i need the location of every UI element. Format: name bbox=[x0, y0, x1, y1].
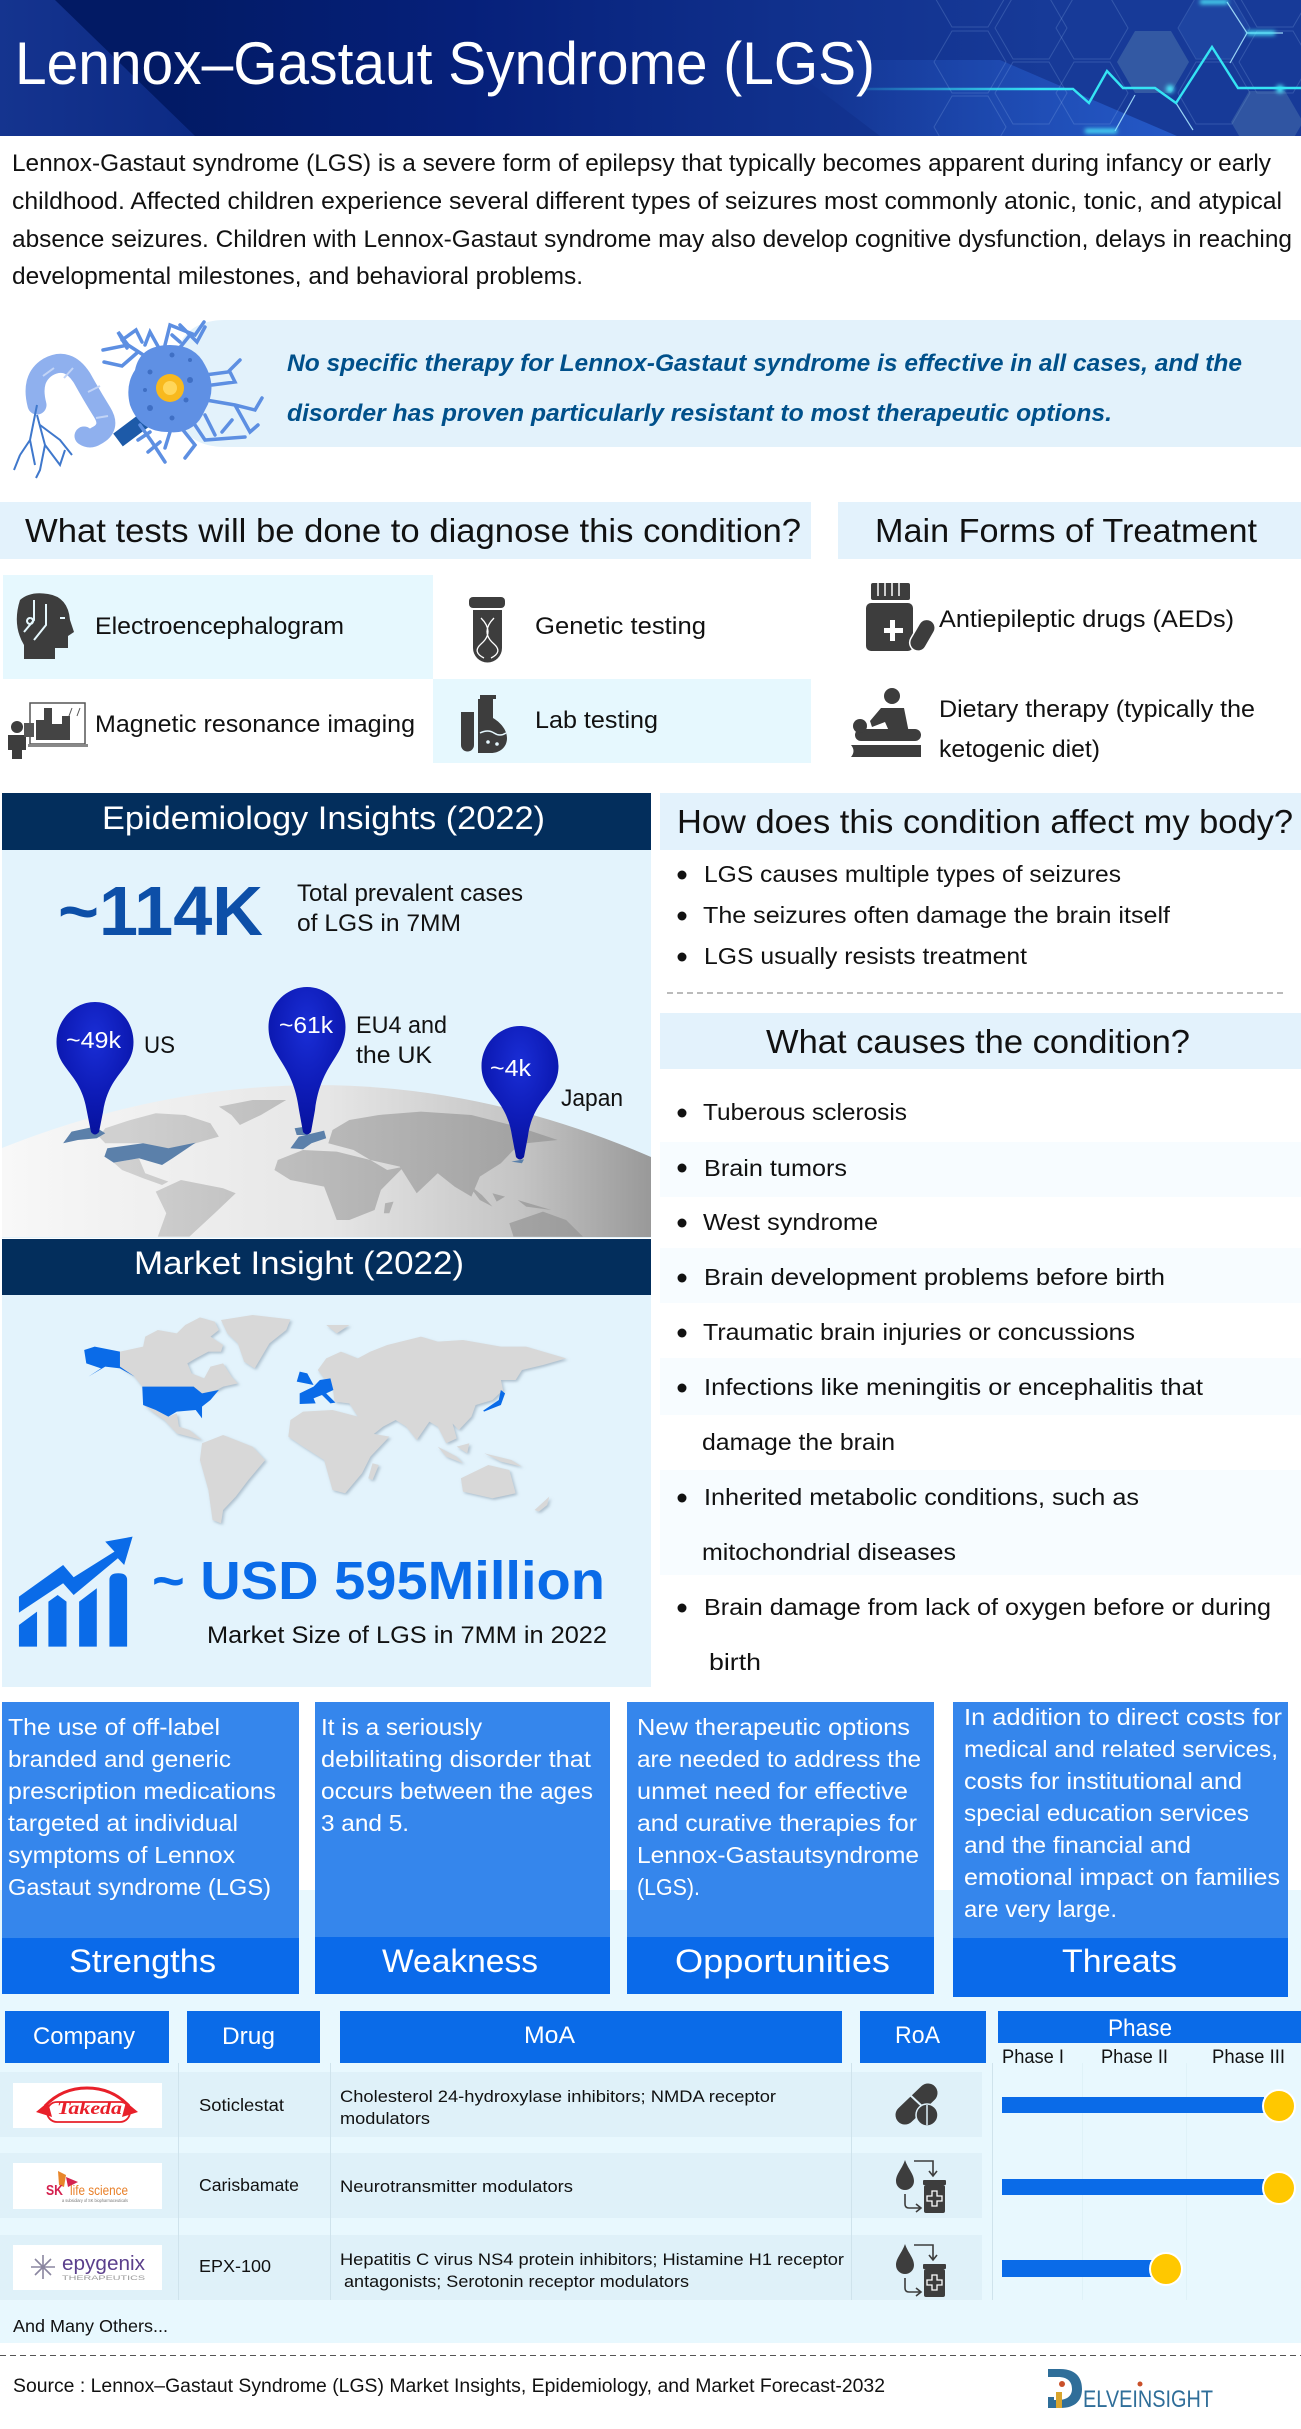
list: causes: mitochondrial diseases bbox=[702, 1539, 956, 1565]
phase bar: Carisbamate bbox=[1002, 2172, 1295, 2204]
intro paragraph bbox=[12, 150, 1292, 290]
list: effects on the body: The seizures often damage the brain itself bbox=[703, 902, 1171, 928]
icon: oral route pills bbox=[905, 2093, 938, 2126]
panel: market insight bbox=[2, 1239, 651, 1687]
callout: no specific therapy bbox=[178, 320, 1301, 447]
SWOT card: threats: medical and related services, bbox=[964, 1736, 1278, 1762]
pin: Japan: Japan bbox=[561, 1085, 623, 1112]
list: causes: Tuberous sclerosis bbox=[703, 1099, 907, 1125]
SWOT card: threats: Threats bbox=[1062, 1943, 1177, 1979]
test cell: genetic testing: Genetic testing bbox=[535, 613, 706, 640]
SWOT card: threats: costs for institutional and bbox=[964, 1768, 1242, 1794]
heading: market insight: Market Insight (2022) bbox=[134, 1245, 464, 1281]
world map bbox=[84, 1315, 566, 1523]
list: causes: West syndrome bbox=[703, 1209, 878, 1235]
heading: market insight bbox=[2, 1239, 651, 1295]
table rows bbox=[0, 2072, 982, 2300]
logo: SK life science: SK bbox=[46, 2182, 63, 2199]
source: Source : Lennox–Gastaut Syndrome (LGS) Market Insights, Epidemiology, and Market Forecast-2032 bbox=[13, 2376, 885, 2397]
heading: main forms of treatment: Main Forms of Treatment bbox=[875, 512, 1257, 549]
SWOT card: weakness: debilitating disorder that bbox=[321, 1746, 592, 1772]
intro paragraph: Lennox-Gastaut syndrome (LGS) is a severe form of epilepsy that typically becomes apparent during infancy or early bbox=[12, 150, 1271, 177]
SWOT card: opportunities bbox=[627, 1702, 934, 1994]
table header: MoA bbox=[524, 2022, 575, 2049]
table header: Phase bbox=[1108, 2015, 1172, 2042]
treatment: dietary therapy: Dietary therapy (typically the bbox=[939, 696, 1255, 723]
pin: Japan: ~4k bbox=[490, 1055, 532, 1081]
SWOT card: threats: and the financial and bbox=[964, 1832, 1191, 1858]
logo: Takeda: Takeda bbox=[57, 2098, 122, 2118]
intro paragraph: developmental milestones, and behavioral problems. bbox=[12, 263, 583, 290]
pin: EU4 and the UK: ~61k bbox=[279, 1012, 334, 1038]
callout: no specific therapy: disorder has proven particularly resistant to most therapeutic options. bbox=[287, 400, 1112, 427]
SWOT card: weakness: occurs between the ages bbox=[321, 1778, 593, 1804]
pin: US: US bbox=[144, 1032, 175, 1059]
test cell: magnetic resonance imaging: Magnetic resonance imaging bbox=[95, 711, 415, 738]
stat: market size: Market Size of LGS in 7MM in 2022 bbox=[207, 1622, 607, 1649]
intro paragraph: absence seizures. Children with Lennox-Gastaut syndrome may also develop cognitive dysfunction, delays in reaching bbox=[12, 226, 1292, 253]
row text: mechanisms of action bbox=[340, 2088, 845, 2291]
table header: Phase III bbox=[1212, 2046, 1285, 2068]
row text: mechanisms of action: Neurotransmitter modulators bbox=[340, 2178, 573, 2196]
ECG line bbox=[860, 47, 1301, 103]
heading: diagnostic tests: What tests will be done to diagnose this condition? bbox=[25, 512, 801, 549]
table header: Phase I bbox=[1002, 2046, 1064, 2068]
pin: Japan bbox=[482, 1026, 623, 1160]
SWOT card: opportunities: unmet need for effective bbox=[637, 1778, 908, 1804]
logo: epygenix bbox=[13, 2245, 162, 2290]
SWOT card: threats bbox=[953, 1702, 1288, 1997]
table header: Company bbox=[33, 2023, 135, 2050]
list: causes: Traumatic brain injuries or concussions bbox=[703, 1319, 1135, 1345]
list: causes bbox=[660, 1099, 1301, 1675]
table header: RoA bbox=[895, 2022, 940, 2049]
test cell: electroencephalogram: Electroencephalogram bbox=[95, 613, 344, 640]
row text: mechanisms of action: Hepatitis C virus NS4 protein inhibitors; Histamine H1 receptor bbox=[340, 2251, 845, 2269]
test cell: genetic testing bbox=[469, 597, 706, 662]
test cell: lab testing bbox=[433, 679, 811, 763]
logo: SK life science bbox=[13, 2163, 162, 2209]
heading: how does this condition affect my body bbox=[660, 793, 1301, 850]
list: causes: damage the brain bbox=[702, 1429, 895, 1455]
SWOT card: strengths: branded and generic bbox=[8, 1746, 231, 1772]
SWOT card: opportunities: New therapeutic options bbox=[637, 1714, 910, 1740]
list: causes: birth bbox=[709, 1649, 761, 1675]
test cell: lab testing: Lab testing bbox=[535, 707, 658, 734]
note: and many others: And Many Others... bbox=[13, 2316, 168, 2336]
heading: what causes the condition: What causes the condition? bbox=[766, 1023, 1190, 1060]
list: causes: Infections like meningitis or encephalitis that bbox=[704, 1374, 1204, 1400]
SWOT card: opportunities: and curative therapies for bbox=[637, 1810, 917, 1836]
row text: mechanisms of action: modulators bbox=[340, 2110, 430, 2128]
pin: US: ~49k bbox=[66, 1027, 122, 1053]
stat: market size: ~ USD 595Million bbox=[152, 1551, 605, 1611]
row text: drugs: EPX-100 bbox=[199, 2256, 271, 2276]
stat: total prevalent cases: ~114K bbox=[58, 872, 263, 950]
SWOT card: strengths: Strengths bbox=[69, 1943, 216, 1979]
logo: Takeda bbox=[13, 2083, 162, 2128]
heading: what causes the condition bbox=[660, 1013, 1301, 1069]
list: effects on the body: LGS causes multiple types of seizures bbox=[704, 861, 1121, 887]
SWOT card: strengths bbox=[2, 1702, 299, 1994]
SWOT card: weakness: 3 and 5. bbox=[321, 1810, 409, 1836]
SWOT card: strengths: symptoms of Lennox bbox=[8, 1842, 235, 1868]
SWOT card: threats: special education services bbox=[964, 1800, 1249, 1826]
stat: total prevalent cases bbox=[58, 872, 523, 950]
heading: main forms of treatment bbox=[838, 502, 1301, 559]
icon: neuron bbox=[14, 322, 262, 478]
SWOT card: weakness bbox=[315, 1702, 610, 1994]
list: effects on the body: LGS usually resists treatment bbox=[704, 943, 1028, 969]
treatment: dietary therapy bbox=[851, 688, 1255, 763]
SWOT card: opportunities: are needed to address the bbox=[637, 1746, 921, 1772]
logo: DelveInsight: ELVEINSIGHT bbox=[1083, 2386, 1213, 2413]
test cell: magnetic resonance imaging bbox=[8, 703, 415, 759]
pale table backdrop bbox=[0, 1890, 1301, 2343]
logo: epygenix: THERAPEUTICS bbox=[62, 2275, 146, 2282]
stat: total prevalent cases: Total prevalent cases bbox=[297, 880, 523, 907]
stat: total prevalent cases: of LGS in 7MM bbox=[297, 910, 461, 937]
pin: EU4 and the UK bbox=[268, 987, 447, 1134]
treatment: antiepileptic drugs bbox=[866, 583, 1234, 654]
table header: Drug bbox=[222, 2023, 275, 2050]
logo: SK life science: a subsidiary of SK biopharmaceuticals bbox=[62, 2198, 129, 2203]
SWOT card: strengths: Gastaut syndrome (LGS) bbox=[8, 1874, 271, 1900]
row text: drugs: Soticlestat bbox=[199, 2095, 284, 2115]
SWOT card: threats: are very large. bbox=[964, 1896, 1117, 1922]
SWOT card: weakness: It is a seriously bbox=[321, 1714, 482, 1740]
row text: drugs bbox=[199, 2095, 299, 2276]
list: causes: Brain development problems before birth bbox=[704, 1264, 1165, 1290]
heading: diagnostic tests bbox=[0, 502, 811, 559]
panel: epidemiology insights bbox=[2, 793, 651, 1238]
test cell: electroencephalogram bbox=[3, 575, 433, 679]
pin: EU4 and the UK: the UK bbox=[356, 1042, 432, 1069]
SWOT card: opportunities: (LGS). bbox=[637, 1874, 700, 1900]
pin: US bbox=[56, 1002, 175, 1134]
SWOT card: opportunities: Lennox-Gastautsyndrome bbox=[637, 1842, 919, 1868]
title: Lennox–Gastaut Syndrome (LGS) bbox=[15, 30, 875, 97]
row text: mechanisms of action: Cholesterol 24-hydroxylase inhibitors; NMDA receptor bbox=[340, 2088, 777, 2106]
callout: no specific therapy: No specific therapy for Lennox-Gastaut syndrome is effective in all cases, and the bbox=[287, 350, 1242, 377]
heading: epidemiology: Epidemiology Insights (2022) bbox=[102, 800, 545, 836]
heading: how does this condition affect my body: How does this condition affect my body? bbox=[677, 803, 1293, 840]
SWOT card: threats: emotional impact on families bbox=[964, 1864, 1280, 1890]
SWOT card: threats: In addition to direct costs for bbox=[964, 1704, 1282, 1730]
globe map bbox=[2, 1085, 651, 1237]
header banner bbox=[0, 0, 1301, 136]
intro paragraph: childhood. Affected children experience several different types of seizures most commonly atonic, tonic, and atypical bbox=[12, 188, 1282, 215]
treatment: dietary therapy: ketogenic diet) bbox=[939, 736, 1100, 763]
pin: EU4 and the UK: EU4 and bbox=[356, 1012, 447, 1039]
logo: epygenix: epygenix bbox=[62, 2253, 145, 2275]
stat: market size bbox=[152, 1551, 607, 1649]
table header: Phase II bbox=[1101, 2046, 1168, 2068]
list: causes: Brain tumors bbox=[704, 1155, 847, 1181]
icon: growth chart bbox=[19, 1537, 133, 1647]
phase bar: EPX-100 bbox=[1002, 2253, 1182, 2285]
icon: injection route row 2 bbox=[896, 2160, 946, 2213]
list: causes: Inherited metabolic conditions, such as bbox=[704, 1484, 1139, 1510]
list: effects on the body bbox=[678, 861, 1171, 969]
logo: SK life science: life science bbox=[70, 2182, 128, 2198]
row text: mechanisms of action: antagonists; Serotonin receptor modulators bbox=[344, 2273, 689, 2291]
SWOT card: opportunities: Opportunities bbox=[675, 1943, 890, 1979]
pipeline table bbox=[0, 2011, 1301, 2336]
heading: epidemiology bbox=[2, 793, 651, 850]
row text: drugs: Carisbamate bbox=[199, 2175, 299, 2195]
SWOT card: strengths: prescription medications bbox=[8, 1778, 276, 1804]
SWOT card: strengths: The use of off-label bbox=[8, 1714, 220, 1740]
list: causes: Brain damage from lack of oxygen before or during bbox=[704, 1594, 1271, 1620]
treatment: antiepileptic drugs: Antiepileptic drugs (AEDs) bbox=[939, 606, 1234, 633]
icon: injection route row 3 bbox=[896, 2244, 946, 2297]
SWOT card: weakness: Weakness bbox=[382, 1943, 538, 1979]
SWOT card: strengths: targeted at individual bbox=[8, 1810, 238, 1836]
phase bar: Soticlestat bbox=[1002, 2090, 1295, 2122]
table header bbox=[5, 2011, 1301, 2068]
logo: DelveInsight bbox=[1048, 2369, 1213, 2413]
